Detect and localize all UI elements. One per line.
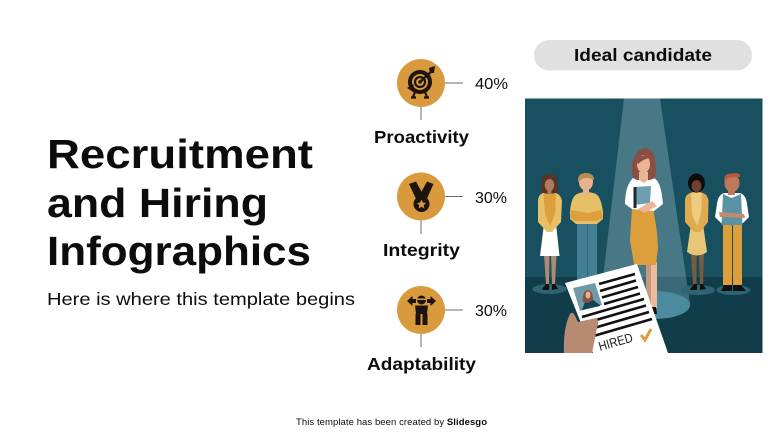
title: and Hiring — [47, 180, 268, 226]
resume text lines — [582, 274, 652, 337]
label: adaptability: Adaptability — [367, 354, 476, 374]
value: 30%: 30% — [475, 190, 507, 207]
person 1 — [538, 174, 562, 290]
pill heading: ideal candidate — [534, 40, 752, 70]
icon: check mark — [641, 329, 651, 340]
icon: medal — [409, 182, 434, 212]
hired resume — [564, 264, 668, 354]
subtitle: Here is where this template begins — [47, 289, 355, 309]
hired stamp: HIRED — [597, 330, 634, 354]
value: 30%: 30% — [475, 303, 507, 320]
spotlight beam — [600, 98, 690, 304]
icon: target with arrow — [408, 66, 435, 98]
pill heading: ideal candidate: Ideal candidate — [574, 45, 712, 65]
metric: integrity — [383, 172, 507, 260]
label: proactivity: Proactivity — [374, 127, 469, 147]
metric: proactivity — [374, 59, 508, 147]
floor shadows — [532, 284, 750, 295]
title — [47, 131, 313, 274]
person 2 — [570, 173, 603, 280]
title: Recruitment — [47, 131, 313, 177]
title: Infographics — [47, 228, 311, 274]
person 5 — [715, 173, 749, 291]
footer credit: This template has been created by Slidesgo — [296, 417, 487, 428]
person 3: central candidate — [625, 148, 663, 314]
hand — [564, 313, 598, 353]
metric: adaptability — [367, 286, 507, 374]
value: 40%: 40% — [475, 76, 508, 93]
person 4 — [685, 174, 708, 290]
label: integrity: Integrity — [383, 240, 460, 260]
illustration: candidates in spotlight — [525, 98, 762, 354]
resume photo — [573, 283, 602, 311]
icon: person with arrows — [407, 296, 436, 325]
